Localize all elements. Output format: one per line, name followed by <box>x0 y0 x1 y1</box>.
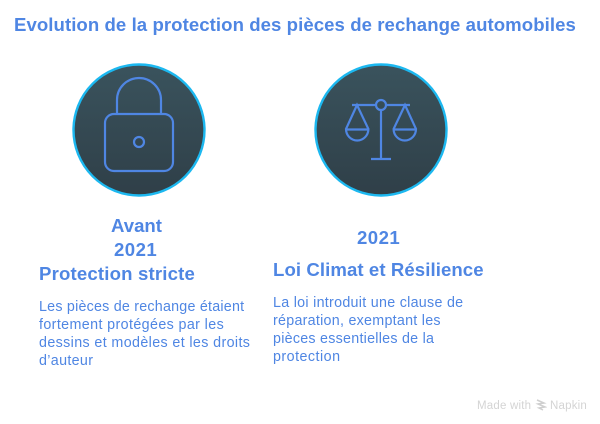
left body text: Les pièces de rechange étaient <box>39 299 244 315</box>
left body text: fortement protégées par les <box>39 317 224 333</box>
left body text: dessins et modèles et les droits <box>39 335 250 351</box>
right body text: La loi introduit une clause de <box>273 295 463 311</box>
right body text: pièces essentielles de la <box>273 331 434 347</box>
right body text: réparation, exemptant les <box>273 313 441 329</box>
icon: padlock <box>74 64 204 196</box>
right body text <box>273 295 463 365</box>
left heading: 2021: 2021 <box>114 239 157 260</box>
title: Evolution de la protection des pièces de rechange automobiles <box>14 14 576 35</box>
right heading: Loi Climat et Résilience: Loi Climat et Résilience <box>273 259 484 280</box>
right body text: protection <box>273 349 340 365</box>
left body text: d’auteur <box>39 353 93 369</box>
left body text <box>39 299 250 369</box>
watermark: Made with Napkin <box>477 400 587 412</box>
icon: scales of justice <box>316 64 446 196</box>
left heading: Protection stricte: Protection stricte <box>39 263 195 284</box>
right heading: 2021: 2021 <box>357 227 400 248</box>
left heading: Avant: Avant <box>111 215 162 236</box>
